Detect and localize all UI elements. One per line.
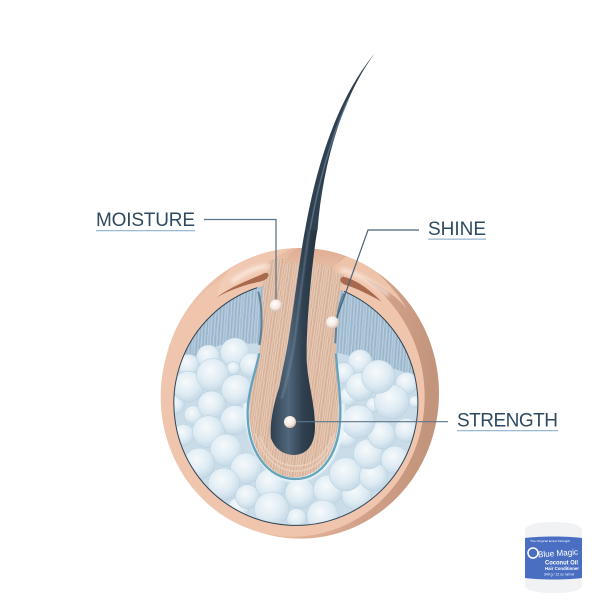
leader line: shine bbox=[336, 230, 419, 320]
hair shaft and bulb bbox=[271, 230, 317, 455]
fat tissue hatching bbox=[184, 286, 414, 375]
weight: 340 g / 12 oz net wt bbox=[544, 572, 574, 576]
pearl: strength bbox=[284, 416, 296, 428]
skin outer band bbox=[162, 248, 439, 539]
pearl: moisture bbox=[270, 300, 282, 312]
dermis circle contents bbox=[174, 286, 418, 525]
hair shine bbox=[282, 230, 309, 398]
right lip highlight bbox=[340, 270, 388, 295]
infographic canvas bbox=[96, 54, 582, 593]
dermis outline bbox=[174, 288, 418, 525]
label: strength: STRENGTH bbox=[457, 410, 558, 432]
hair tip bbox=[305, 53, 375, 230]
tagline: The Original Extra Strength bbox=[530, 539, 570, 543]
jar body bbox=[525, 522, 582, 593]
skin cross-section diagram bbox=[161, 230, 439, 539]
follicle sheath bbox=[249, 256, 348, 477]
hair tip shine bbox=[310, 100, 348, 230]
leader line: strength bbox=[292, 421, 448, 423]
brand text: Blue Magic bbox=[538, 547, 579, 559]
follicle glow bbox=[246, 403, 342, 479]
bubble base bbox=[170, 343, 427, 530]
leader line: moisture bbox=[204, 220, 276, 302]
fat cell bubbles bbox=[166, 338, 421, 532]
jar label bbox=[525, 536, 582, 580]
product name: Coconut Oil bbox=[545, 560, 578, 566]
swirl logo bbox=[528, 548, 538, 558]
skin surface lips bbox=[217, 245, 407, 308]
left lip highlight bbox=[232, 266, 267, 282]
follicle blue edge bbox=[248, 353, 340, 479]
right crease bbox=[340, 277, 382, 302]
inner pale band bbox=[161, 257, 425, 537]
right skin lip bbox=[334, 254, 407, 308]
product type: Hair Conditioner bbox=[545, 566, 579, 571]
left skin lip bbox=[217, 246, 296, 297]
centre skin cap bbox=[282, 248, 345, 268]
follicle bottom fibres bbox=[255, 433, 335, 471]
product jar: Blue Magic bbox=[525, 522, 582, 593]
pearl: shine bbox=[326, 316, 339, 329]
label: moisture: MOISTURE bbox=[96, 210, 195, 231]
left crease bbox=[217, 273, 269, 297]
label: shine: SHINE bbox=[428, 219, 486, 240]
fat pocket edges bbox=[258, 292, 344, 345]
